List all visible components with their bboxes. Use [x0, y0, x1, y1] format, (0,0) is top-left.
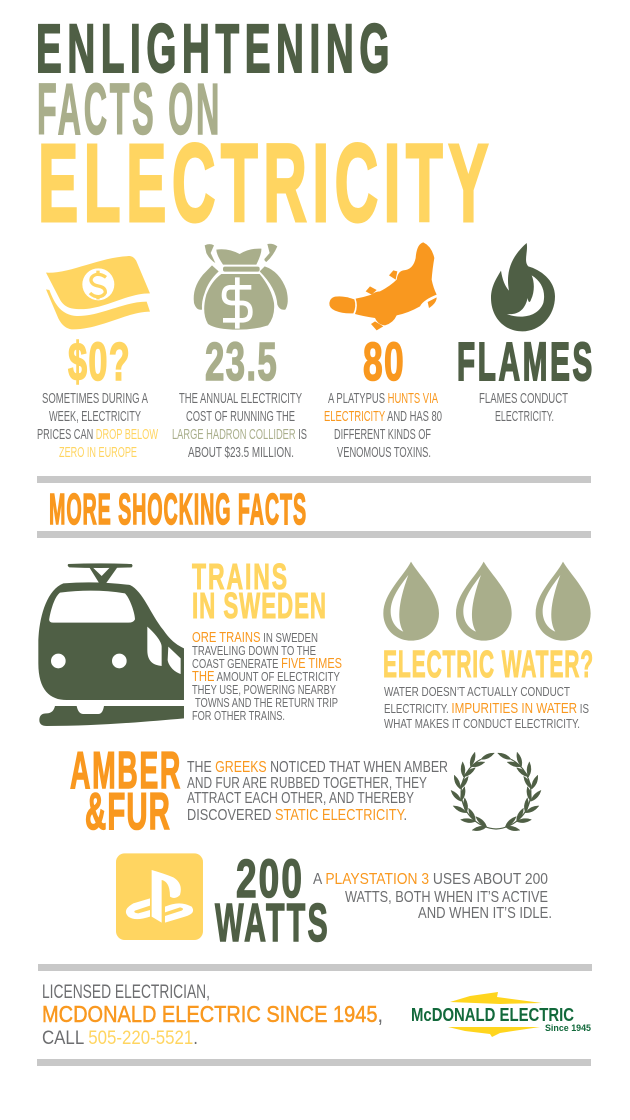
panel: hadron collider cost	[172, 244, 307, 461]
text: call to action	[42, 982, 383, 1049]
text: greeks description: AND FUR ARE RUBBED TOGETHER, THEY	[187, 775, 427, 792]
text: greeks description: DISCOVERED STATIC ELECTRICITY.	[187, 807, 407, 824]
text: zero price description: PRICES CAN DROP BELOW	[37, 427, 158, 443]
text: zero price description: SOMETIMES DURING A	[42, 391, 148, 407]
text: trains description: THEY USE, POWERING NEARBY	[192, 683, 336, 697]
text: playstation description: AND WHEN IT’S IDLE.	[418, 905, 552, 922]
text: trains description	[192, 630, 342, 723]
icon: water drop 1	[383, 562, 439, 641]
text: zero price description	[37, 391, 158, 461]
text: platypus description	[324, 391, 442, 461]
icon: laurel wreath	[450, 751, 542, 832]
text: zero price description: WEEK, ELECTRICITY	[49, 409, 141, 425]
panel: footer	[42, 982, 591, 1049]
heading: 200 watts: 200	[236, 849, 304, 909]
text: trains description: TRAVELING DOWN TO THE	[192, 644, 316, 658]
panel: zero price	[37, 256, 158, 461]
text: hadron collider description: COST OF RUNNING THE	[186, 409, 295, 425]
icon: platypus	[329, 242, 437, 330]
panel: electric water	[383, 562, 594, 731]
panel: flames	[457, 243, 595, 425]
text: call to action: MCDONALD ELECTRIC SINCE 1945,	[42, 1001, 383, 1027]
text: call to action: LICENSED ELECTRICIAN,	[42, 982, 210, 1003]
text: water description: ELECTRICITY. IMPURITIES IN WATER IS	[384, 700, 589, 717]
logo: mcdonald electric	[411, 992, 591, 1037]
heading: 200 watts	[215, 849, 330, 953]
text: trains description: FOR OTHER TRAINS.	[192, 709, 285, 723]
panel: amber and fur	[70, 742, 542, 841]
icon: money bag	[194, 244, 288, 330]
icon: playstation tile	[116, 853, 203, 940]
text: hadron collider description: LARGE HADRON COLLIDER IS	[172, 427, 307, 443]
text: greeks description: ATTRACT EACH OTHER, AND THEREBY	[187, 790, 414, 807]
icon: water drop 3	[536, 562, 591, 641]
title	[36, 10, 494, 245]
text: platypus description: VENOMOUS TOXINS.	[337, 445, 431, 461]
text: greeks description	[187, 759, 448, 824]
text: platypus description: DIFFERENT KINDS OF	[334, 427, 431, 443]
infographic canvas: MORE SHOCKING FACTS	[49, 485, 307, 534]
stat: $0?: $0?	[68, 332, 131, 392]
heading: amber and fur: AMBER	[70, 742, 182, 800]
text: water description	[384, 685, 589, 731]
text: hadron collider description: ABOUT $23.5 MILLION.	[188, 445, 294, 461]
logo: mcdonald electric: Since 1945	[545, 1023, 591, 1033]
icon: flame	[491, 243, 555, 331]
text: playstation description	[313, 871, 552, 922]
text: hadron collider description	[172, 391, 307, 461]
heading: trains in sweden: TRAINS	[192, 556, 289, 597]
icon: banknote	[46, 256, 150, 329]
heading: 200 watts: WATTS	[215, 893, 330, 953]
text: playstation description: A PLAYSTATION 3 USES ABOUT 200	[313, 871, 548, 888]
text: water description: WATER DOESN’T ACTUALLY CONDUCT	[384, 685, 570, 699]
text: trains description: COAST GENERATE FIVE TIMES	[192, 656, 342, 672]
icon: water drop 2	[456, 562, 512, 641]
text: zero price description: ZERO IN EUROPE	[59, 445, 137, 461]
text: hadron collider description: THE ANNUAL ELECTRICITY	[179, 391, 302, 407]
stat: 80: 80	[363, 332, 405, 392]
text: flames description: ELECTRICITY.	[495, 409, 554, 425]
icon: train	[38, 563, 184, 726]
panel: trains in sweden	[38, 556, 342, 726]
text: flames description	[479, 391, 568, 425]
text: call to action: CALL 505-220-5521.	[42, 1028, 198, 1049]
title: FACTS ON	[37, 70, 222, 150]
text: playstation description: WATTS, BOTH WHEN IT’S ACTIVE	[345, 889, 548, 906]
text: platypus description: ELECTRICITY AND HAS 80	[324, 409, 442, 425]
logo: mcdonald electric: McDONALD ELECTRIC	[411, 1005, 574, 1025]
text: trains description: ORE TRAINS IN SWEDEN	[192, 630, 318, 646]
text: trains description: TOWNS AND THE RETURN TRIP	[195, 696, 338, 710]
heading: trains in sweden: IN SWEDEN	[192, 585, 327, 626]
text: flames description: FLAMES CONDUCT	[479, 391, 568, 407]
panel: platypus	[324, 242, 442, 461]
text: greeks description: THE GREEKS NOTICED THAT WHEN AMBER	[187, 759, 448, 776]
stat: 23.5: 23.5	[205, 332, 278, 392]
heading: amber and fur: &FUR	[85, 783, 171, 841]
heading: amber and fur	[70, 742, 182, 841]
text: water description: WHAT MAKES IT CONDUCT ELECTRICITY.	[384, 717, 580, 731]
heading: trains in sweden	[192, 556, 327, 626]
panel: playstation	[116, 849, 552, 953]
text: trains description: THE AMOUNT OF ELECTRICITY	[192, 669, 341, 685]
text: platypus description: A PLATYPUS HUNTS VIA	[328, 391, 438, 407]
